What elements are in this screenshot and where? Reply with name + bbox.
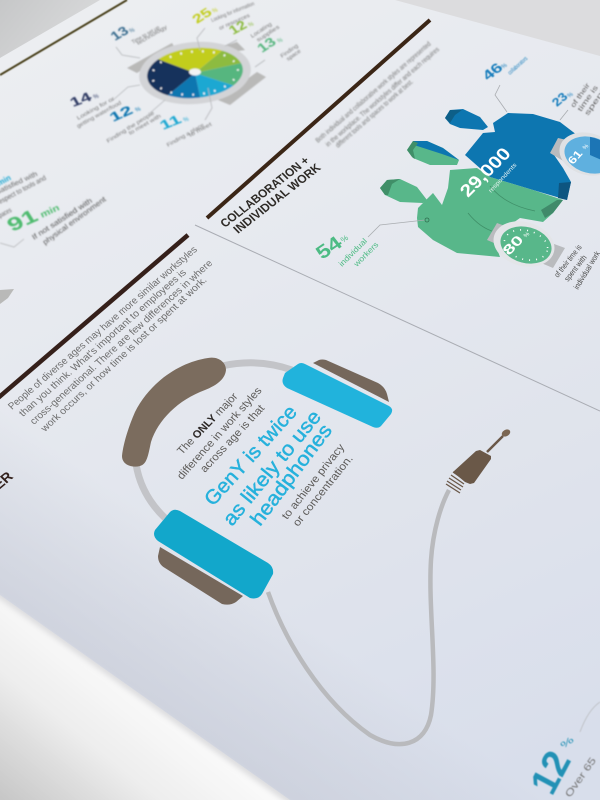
top ear cushion (282, 363, 392, 428)
stat: 11%: to meet (188, 121, 214, 139)
icon: headphones (122, 358, 449, 744)
stat: 25%: % (212, 7, 219, 15)
icon: green head (380, 179, 427, 203)
stat: 46% collaborators (479, 56, 529, 83)
stat: 54% individual workers: workers (351, 240, 380, 269)
heading: collaboration: INDIVIDUAL WORK (230, 161, 324, 236)
text: time spent with individual work: spent with (562, 253, 589, 283)
stat: 46% collaborators: % (501, 62, 509, 71)
text: 23% note: time is (577, 84, 600, 113)
icon: dial ticks (150, 48, 240, 98)
stat: 25%: 25 (189, 5, 215, 26)
text: 23% note (570, 81, 600, 117)
stat: 61% (566, 143, 591, 167)
stat: 12% blue: 12 (106, 103, 136, 125)
stat: 46% collaborators: 46 (479, 59, 506, 83)
bracket line (0, 239, 24, 247)
stat: 11%: Finding a place (166, 123, 205, 149)
stat: 12% green: % (248, 21, 255, 29)
stat: 13% green (254, 34, 302, 63)
text: physical environment note: If not satisfied with (30, 196, 94, 242)
text: generations paragraph: work occurs, or how time is lost or spent at work. (38, 275, 210, 435)
text: privacy note: to achieve privacy (280, 442, 348, 522)
stat: 54% individual workers (312, 233, 380, 269)
icon: blue body (465, 113, 577, 200)
text: physical environment note: physical environment (41, 194, 108, 247)
left padded arc (122, 358, 226, 467)
stat: 91 min: min (39, 202, 61, 220)
callout: GenY headline (200, 401, 337, 530)
stat: 14%: 14 (67, 89, 95, 110)
stat: 12% green (226, 17, 281, 44)
icon: audio jack (446, 428, 511, 493)
heading rule: top section (0, 0, 127, 75)
stat: 13% green: space (286, 49, 302, 63)
panel: time spent dial chart (67, 0, 302, 149)
stat: 14%: getting water/food (76, 100, 123, 130)
text: the only major difference: across age is that (198, 403, 267, 475)
icon: dial ring (137, 37, 253, 109)
stat: 25%: or resources (218, 13, 251, 32)
stat: 80%: % (523, 231, 532, 239)
text: the only major difference: difference in work styles (175, 385, 265, 482)
icon: blue head (445, 109, 488, 130)
stat: 13% green: % (277, 37, 284, 45)
heading: collaboration: COLLABORATION + (217, 154, 312, 230)
text: 23% note: of their (570, 81, 592, 109)
stat: 12% green: supplies (256, 24, 281, 44)
chart: two-person population graphic (380, 109, 600, 273)
stat: 25% (189, 1, 255, 32)
text: generations paragraph: People of diverse ages may have more similar workstyles (6, 245, 200, 412)
text: generations paragraph: cross-generational. There are few differences in where (28, 258, 216, 427)
stat: 12% over 65 (523, 702, 600, 800)
stat: 91 min (3, 202, 61, 236)
stat: 14%: Looking for or (76, 96, 116, 122)
icon: blue watch (550, 126, 600, 182)
icon: dial straps (127, 42, 266, 105)
stat: 13%: 13 (107, 23, 132, 43)
stat: 23%: % (567, 91, 575, 100)
stat: 80%: 80 (499, 232, 527, 258)
leader lines (368, 85, 568, 237)
stat: 12% over 65: % (558, 734, 576, 751)
text: time spent with individual work (552, 243, 600, 291)
heading rule: collaboration section (207, 20, 430, 218)
stat: 23%: 23 (549, 90, 571, 109)
stat: 12% over 65: Over 65 (563, 755, 599, 800)
paper shading (0, 400, 600, 800)
icon: green body shadow (541, 200, 563, 218)
text: tools and spaces note (0, 171, 48, 221)
stat: 12% blue (106, 103, 162, 145)
stat: 12% blue: to meet with (128, 114, 162, 137)
stat: 14% (67, 89, 123, 130)
stat: 13%: % (129, 27, 136, 35)
glare: white desk area at the bottom left (0, 592, 300, 800)
icon: green body (417, 168, 563, 257)
stat: 54% individual workers: individual (337, 236, 369, 268)
text: time spent with individual work: of their time is (552, 243, 584, 279)
icon: mixed head (407, 141, 459, 165)
leader lines (112, 28, 265, 120)
stat: 13% green: 13 (254, 34, 279, 55)
chart: dial segments (146, 46, 244, 100)
callout: GenY headline: headphones (246, 420, 337, 530)
stat: 54% individual workers: % (339, 233, 350, 245)
leader curve (580, 702, 600, 732)
stat: 80% (499, 231, 532, 258)
stat: 12% blue: Finding the people (106, 110, 156, 145)
text: privacy note: or concentration. (291, 453, 356, 529)
heading rule: generations section (0, 235, 188, 398)
stat: 61%: % (582, 143, 591, 151)
text: 23% note: spent (584, 88, 600, 117)
stat: 29,000 respondents: respondents (488, 162, 518, 194)
stat: 14%: % (93, 93, 100, 101)
panel: minutes lost (0, 171, 108, 247)
stat: 11%: % (183, 116, 190, 124)
text: the only major difference: The ONLY major (175, 391, 241, 457)
stat: 11% (157, 112, 214, 149)
stat: 61%: 61 (566, 148, 585, 167)
icon: dial centre (189, 68, 201, 76)
icon: green watch (487, 215, 565, 273)
stat: 12% green: Locating (250, 22, 273, 40)
stat: 12% over 65: 12 (523, 744, 580, 800)
text: collaboration intro: in the workplace. The workstyles differ and each requires (325, 46, 441, 149)
stat: 13%: technology (136, 24, 169, 47)
callout: GenY headline: as likely to use (219, 406, 326, 530)
stat: 11%: 11 (157, 112, 184, 133)
stat: 12% green: 12 (226, 17, 250, 37)
icon: leader dot (425, 218, 429, 222)
icon: cropped gray strap (0, 289, 14, 304)
stat: 13% (107, 23, 169, 47)
text: collaboration intro: different tools and spaces to work at best. (335, 79, 415, 150)
top ear back pad (313, 360, 389, 402)
stat: 46% collaborators: collaborators (507, 56, 529, 76)
panel: collaboration and individual work (217, 41, 600, 291)
stat: 13% green: Finding (280, 43, 300, 60)
panel: generations (0, 245, 511, 744)
text: generations paragraph: than you think. What's important to employees is (17, 268, 189, 419)
bottom ear cushion (154, 510, 273, 598)
stat: 29,000 respondents: 29,000 (456, 144, 515, 201)
background: top-left desk corner (0, 0, 100, 58)
stat: 12% blue: % (135, 106, 142, 114)
headband (136, 363, 292, 518)
stat: 13%: Time to set up (131, 25, 161, 46)
icon: blue body shadow (558, 182, 571, 200)
bottom ear back pad (158, 547, 243, 605)
callout: GenY headline: GenY is twice (200, 401, 302, 510)
fold lines (468, 186, 535, 232)
cable (268, 490, 449, 744)
text: collaboration intro: Both individual and collaborative work styles are represented (315, 41, 433, 145)
stat: 91 min: 91 (3, 206, 43, 236)
section divider line (195, 225, 600, 411)
stat: 54% individual workers: 54 (312, 233, 347, 264)
